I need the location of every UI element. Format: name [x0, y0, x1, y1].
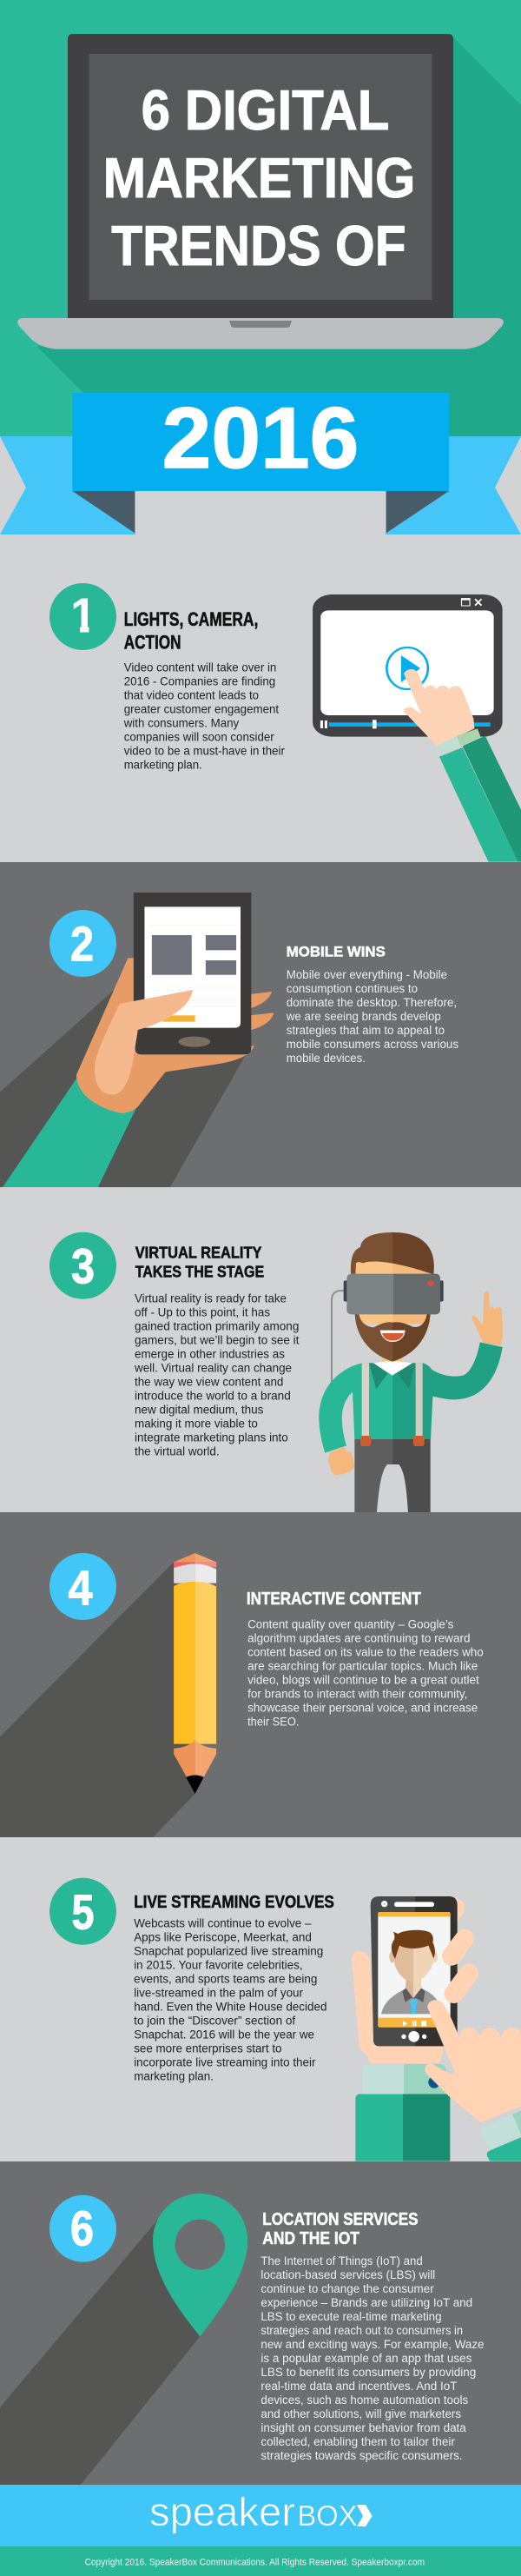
copyright text: Copyright 2016. SpeakerBox Communications. All Rights Reserved. Speakerboxpr.com [85, 2557, 425, 2567]
laptop long shadow [36, 37, 521, 436]
number badge 1: 1 [70, 588, 96, 644]
panel: header [0, 0, 521, 534]
body text 5: marketing plan. [134, 2070, 214, 2083]
body text 3: the way we view content and [135, 1376, 283, 1389]
body text 1: marketing plan. [124, 759, 202, 772]
heading 1: LIGHTS, CAMERA, [124, 608, 258, 630]
ribbon tails [0, 436, 521, 534]
body text 1: greater customer engagement [124, 703, 279, 716]
section 4 background [0, 1512, 521, 1837]
number badge 6 [49, 2195, 116, 2262]
body text 5: live-streamed in the palm of your [134, 1987, 303, 2000]
icon: video player with pointing hand [313, 594, 521, 862]
body text 6: LBS to execute real-time marketing [260, 2310, 441, 2323]
body text 2: Mobile over everything - Mobile [287, 968, 447, 981]
heading 6: AND THE IOT [262, 2229, 359, 2248]
icon: pencil with long shadow [0, 1553, 216, 1837]
number badge 5 [49, 1878, 116, 1945]
body text 6: location-based services (LBS) will [260, 2268, 435, 2281]
body text 5: Webcasts will continue to evolve – [134, 1917, 312, 1930]
body text 2: consumption continues to [287, 982, 418, 995]
body text 5: hand. Even the White House decided [134, 2001, 326, 2014]
body text 2: mobile consumers across various [287, 1038, 458, 1051]
logo: speakerBOX: BOX [297, 2500, 358, 2532]
body text 6: strategies towards specific consumers. [260, 2449, 463, 2462]
body text 6: is a popular example of an app that uses [260, 2352, 472, 2365]
number badge 2 [49, 910, 116, 977]
body text 3: the virtual world. [135, 1445, 220, 1458]
icon: man wearing VR headset [319, 1232, 503, 1512]
body text 1: companies will soon consider [124, 731, 274, 744]
body text 1: 2016 - Companies are finding [124, 675, 275, 688]
heading 3 [135, 1245, 264, 1281]
heading 6 [262, 2210, 419, 2248]
body text 2: mobile devices. [287, 1052, 366, 1065]
title: MARKETING [103, 147, 415, 209]
panel: trend 1 [49, 583, 521, 862]
body text 1: Video content will take over in [124, 661, 276, 674]
body text 4: Content quality over quantity – Google’s [247, 1618, 454, 1631]
number badge 3: 3 [71, 1239, 95, 1295]
body text 5: incorporate live streaming into their [134, 2056, 316, 2069]
panel: trend 2 [0, 862, 521, 1187]
number badge 5: 5 [71, 1884, 94, 1940]
body text 6: and other solutions, will give marketers [260, 2407, 461, 2420]
body text 6: new and exciting ways. For example, Waze [260, 2338, 485, 2351]
body text 3: off - Up to this point, it has [135, 1306, 270, 1319]
panel: footer [0, 2485, 521, 2576]
body text 2: dominate the desktop. Therefore, [287, 996, 457, 1009]
section 2 background [0, 862, 521, 1187]
logo: speakerBOX: speaker [149, 2489, 295, 2534]
body text 5: see more enterprises start to [134, 2042, 281, 2055]
body text 5: Snapchat. 2016 will be the year we [134, 2028, 314, 2042]
year banner: 2016 [162, 389, 359, 486]
heading 3: VIRTUAL REALITY [135, 1245, 262, 1262]
heading 6: LOCATION SERVICES [262, 2210, 419, 2229]
title: 6 DIGITAL [142, 79, 389, 142]
body text 6: The Internet of Things (IoT) and [260, 2254, 423, 2267]
heading 4: INTERACTIVE CONTENT [247, 1590, 421, 1609]
copyright band [0, 2546, 521, 2576]
body text 6: experience – Brands are utilizing IoT and [260, 2296, 472, 2309]
body text 4: showcase their personal voice, and increase [247, 1702, 478, 1715]
body text 3: well. Virtual reality can change [134, 1362, 292, 1375]
body text 3: integrate marketing plans into [135, 1431, 288, 1444]
body text 1 [123, 661, 285, 772]
body text 5 [134, 1917, 326, 2083]
body text 1: with consumers. Many [123, 717, 239, 730]
logo: speakerBOX [149, 2489, 373, 2534]
year banner [72, 389, 449, 491]
body text 3: emerge in other industries as [135, 1348, 285, 1361]
body text 3: new digital medium, thus [135, 1404, 264, 1417]
body text 5: Snapchat popularized live streaming [134, 1945, 323, 1958]
body text 3: making it more viable to [135, 1417, 258, 1431]
heading 1 [124, 608, 258, 654]
body text 6: collected, enabling them to tailor their [260, 2435, 455, 2448]
body text 4 [247, 1618, 484, 1729]
body text 6: continue to change the consumer [260, 2282, 434, 2295]
body text 4: their SEO. [247, 1716, 299, 1729]
body text 3: Virtual reality is ready for take [135, 1292, 287, 1305]
body text 5: to join the “Discover” section of [134, 2015, 295, 2028]
header green background [0, 0, 521, 436]
body text 1: that video content leads to [124, 689, 259, 702]
body text 4: algorithm updates are continuing to reward [247, 1632, 471, 1645]
body text 4: for brands to interact with their community, [247, 1688, 467, 1701]
body text 5: in 2015. Your favorite celebrities, [134, 1959, 303, 1972]
body text 2: we are seeing brands develop [286, 1010, 441, 1023]
body text 6: LBS to benefit its consumers by providing [260, 2366, 476, 2379]
body text 5: Apps like Periscope, Meerkat, and [134, 1931, 312, 1944]
body text 4: content based on its value to the readers who [247, 1646, 484, 1659]
number badge 1 [49, 583, 116, 650]
number badge 4: 4 [68, 1561, 93, 1617]
body text 6: strategies and reach out to consumers in [260, 2324, 463, 2337]
body text 6: real-time data and incentives. And IoT [260, 2380, 457, 2393]
panel: trend 4 [0, 1512, 521, 1837]
body text 4: are searching for particular topics. Much like [247, 1660, 478, 1673]
section 6 background [0, 2161, 521, 2485]
panel: trend 6 [0, 2161, 521, 2485]
number badge 2: 2 [70, 917, 94, 973]
title [103, 79, 415, 277]
body text 6 [260, 2254, 485, 2462]
body text 3: gamers, but we’ll begin to see it [135, 1334, 300, 1347]
panel: trend 5 [49, 1878, 521, 2161]
icon: hand holding phone [0, 893, 274, 1187]
body text 3 [134, 1292, 300, 1458]
body text 4: video, blogs will continue to be a great outlet [247, 1674, 479, 1687]
body text 5: events, and sports teams are being [134, 1973, 317, 1986]
body text 6: devices, such as home automation tools [260, 2393, 468, 2407]
heading 5: LIVE STREAMING EVOLVES [134, 1893, 334, 1912]
body text 6: insight on consumer behavior from data [260, 2421, 466, 2434]
number badge 4 [49, 1553, 116, 1620]
laptop [17, 34, 504, 349]
number badge 3 [49, 1232, 116, 1299]
body text 1: video to be a must-have in their [124, 745, 285, 758]
panel: trend 3 [49, 1232, 503, 1512]
footer logo band [0, 2485, 521, 2546]
icon: hands holding phone with live stream [352, 1896, 521, 2161]
body text 3: gained traction primarily among [135, 1320, 299, 1333]
icon: map pin with long shadow [0, 2194, 247, 2485]
title: TRENDS OF [111, 215, 406, 277]
body text 2 [286, 968, 458, 1065]
heading 3: TAKES THE STAGE [135, 1264, 264, 1281]
body text 2: strategies that aim to appeal to [287, 1024, 445, 1037]
heading 2: MOBILE WINS [287, 944, 386, 960]
body text 3: introduce the world to a brand [135, 1390, 291, 1403]
number badge 6: 6 [70, 2201, 94, 2256]
heading 1: ACTION [124, 632, 181, 654]
